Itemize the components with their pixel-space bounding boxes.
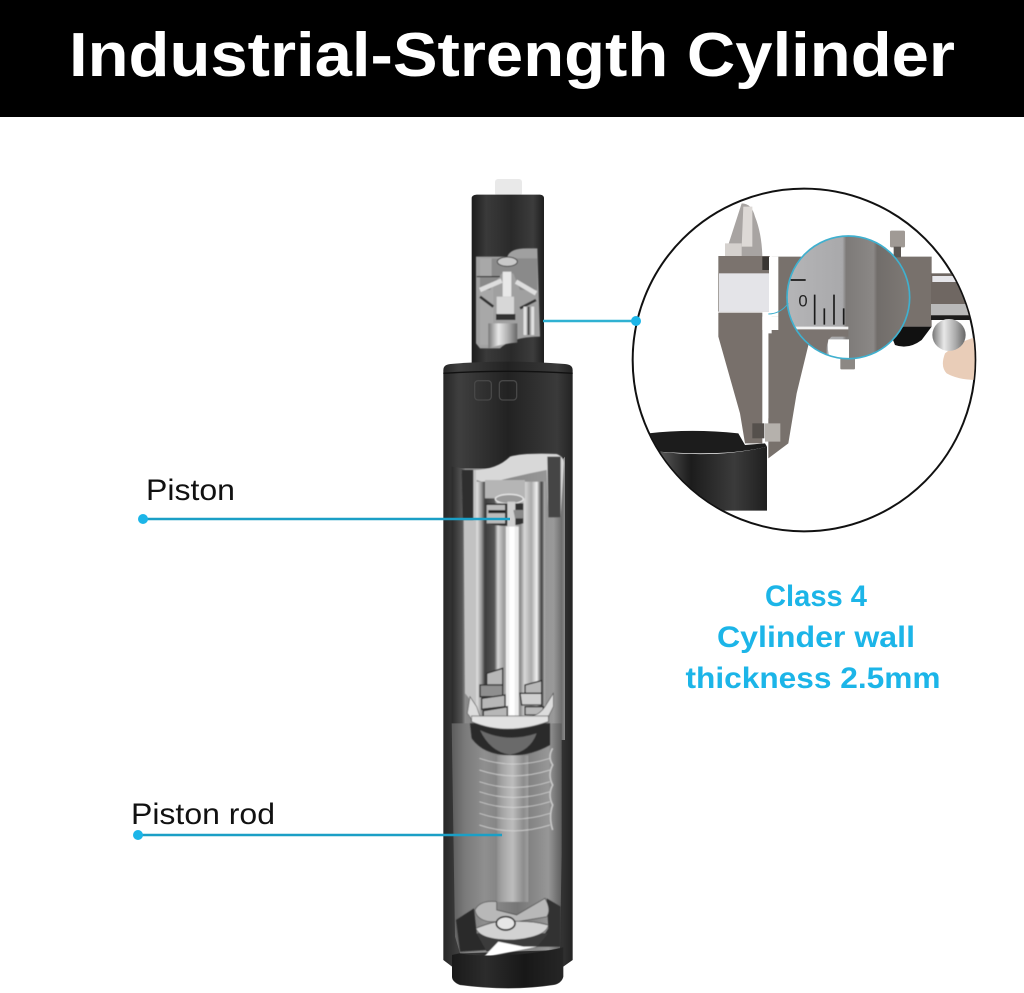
- label: Piston: Piston: [146, 474, 235, 507]
- base valve plates: [456, 908, 488, 952]
- magnifier lens: [768, 235, 911, 360]
- label: Class 4 wall thickness: Cylinder wall: [717, 621, 915, 654]
- leader line: wall thickness: [543, 316, 641, 326]
- release button: [495, 179, 522, 196]
- caliper movable jaw and beam: [762, 231, 978, 458]
- gas cylinder cutaway: [443, 179, 573, 988]
- vernier scale marks: [791, 280, 844, 325]
- collar square marks: [475, 381, 517, 400]
- caliper lower jaw: [718, 313, 762, 443]
- inner sleeve: [462, 454, 564, 732]
- label: Class 4 wall thickness: Class 4: [765, 580, 868, 613]
- bottom flange: [452, 947, 563, 988]
- caliper fixed upper jaw: [718, 203, 770, 443]
- black tube cup being measured: [648, 431, 767, 511]
- magnifier lens: 0: [798, 292, 808, 311]
- transparent lower chamber: [452, 716, 562, 957]
- title banner: [0, 0, 1024, 117]
- label: Class 4 wall thickness: thickness 2.5mm: [686, 662, 940, 695]
- lower seal blocks: [480, 668, 543, 720]
- title text: Industrial-Strength Cylinder: [69, 21, 955, 90]
- label: Piston: [138, 474, 510, 524]
- measurement inset circle: [633, 189, 978, 531]
- label: Piston rod: [131, 798, 502, 840]
- piston rod shaft: [506, 527, 519, 720]
- outer cylinder body: [443, 362, 573, 967]
- label: Class 4 wall thickness: [686, 580, 940, 695]
- piston head: [486, 494, 523, 527]
- upper valve window: [476, 248, 540, 348]
- seal dome: [470, 723, 550, 755]
- piston window: [452, 454, 565, 740]
- rod: [497, 755, 528, 902]
- upper tube: [472, 195, 544, 367]
- label: Piston rod: Piston rod: [131, 798, 275, 831]
- spring coils: [479, 758, 550, 831]
- sleeve bottom cup: [467, 693, 553, 732]
- caliper screws and thumb: [890, 231, 905, 247]
